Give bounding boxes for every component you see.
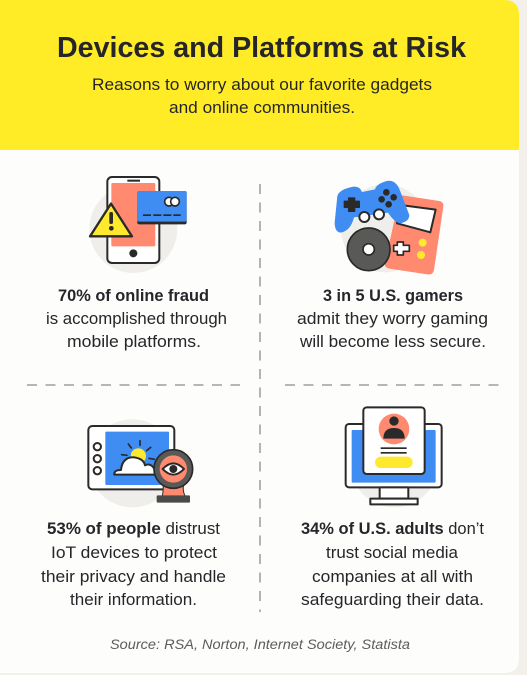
text: 3 in 5 U.S. gamers: [297, 287, 488, 351]
text: 70% of online fraud: [46, 287, 227, 351]
subtitle: and online communities.: [169, 99, 355, 117]
text: 70% of online fraud: 70% of online fraud: [58, 287, 209, 305]
subtitle: [92, 76, 432, 117]
panel: IoT distrust: [41, 419, 226, 609]
icon: phone with warning and credit card: [89, 177, 187, 273]
panel: social media trust: [301, 407, 484, 609]
text: 3 in 5 U.S. gamers: will become less secure.: [299, 333, 486, 351]
header panel: [0, 0, 519, 150]
panel: mobile fraud: [46, 177, 227, 351]
text: 53% of people distrust: their information.: [70, 591, 197, 609]
text: 53% of people distrust: their privacy and handle: [41, 568, 226, 586]
text: 3 in 5 U.S. gamers: 3 in 5 U.S. gamers: [323, 287, 463, 305]
text: 70% of online fraud: is accomplished through: [46, 310, 227, 328]
text: 34% of U.S. adults: trust social media: [326, 544, 459, 562]
text: 53% of people distrust: 53% of people distrust: [47, 520, 220, 538]
subtitle: Reasons to worry about our favorite gadgets: [92, 76, 432, 94]
text: 34% of U.S. adults: [301, 520, 484, 609]
text: 3 in 5 U.S. gamers: admit they worry gaming: [297, 310, 488, 328]
text: 53% of people distrust: [41, 520, 226, 609]
text: 34% of U.S. adults: 34% of U.S. adults don’t: [301, 520, 484, 538]
source note: Source: RSA, Norton, Internet Society, Statista: [110, 637, 411, 652]
icon: game controller, handheld console and disc: [335, 181, 443, 274]
icon: monitor with profile card: [346, 407, 442, 507]
title: Devices and Platforms at Risk: [57, 32, 467, 64]
panel: gamers: [297, 181, 488, 351]
text: 34% of U.S. adults: safeguarding their data.: [301, 591, 484, 609]
text: 34% of U.S. adults: companies at all with: [312, 568, 473, 586]
text: 70% of online fraud: mobile platforms.: [67, 333, 201, 351]
icon: tablet with weather image and webcam eye: [88, 419, 193, 507]
text: 53% of people distrust: IoT devices to protect: [51, 544, 217, 562]
